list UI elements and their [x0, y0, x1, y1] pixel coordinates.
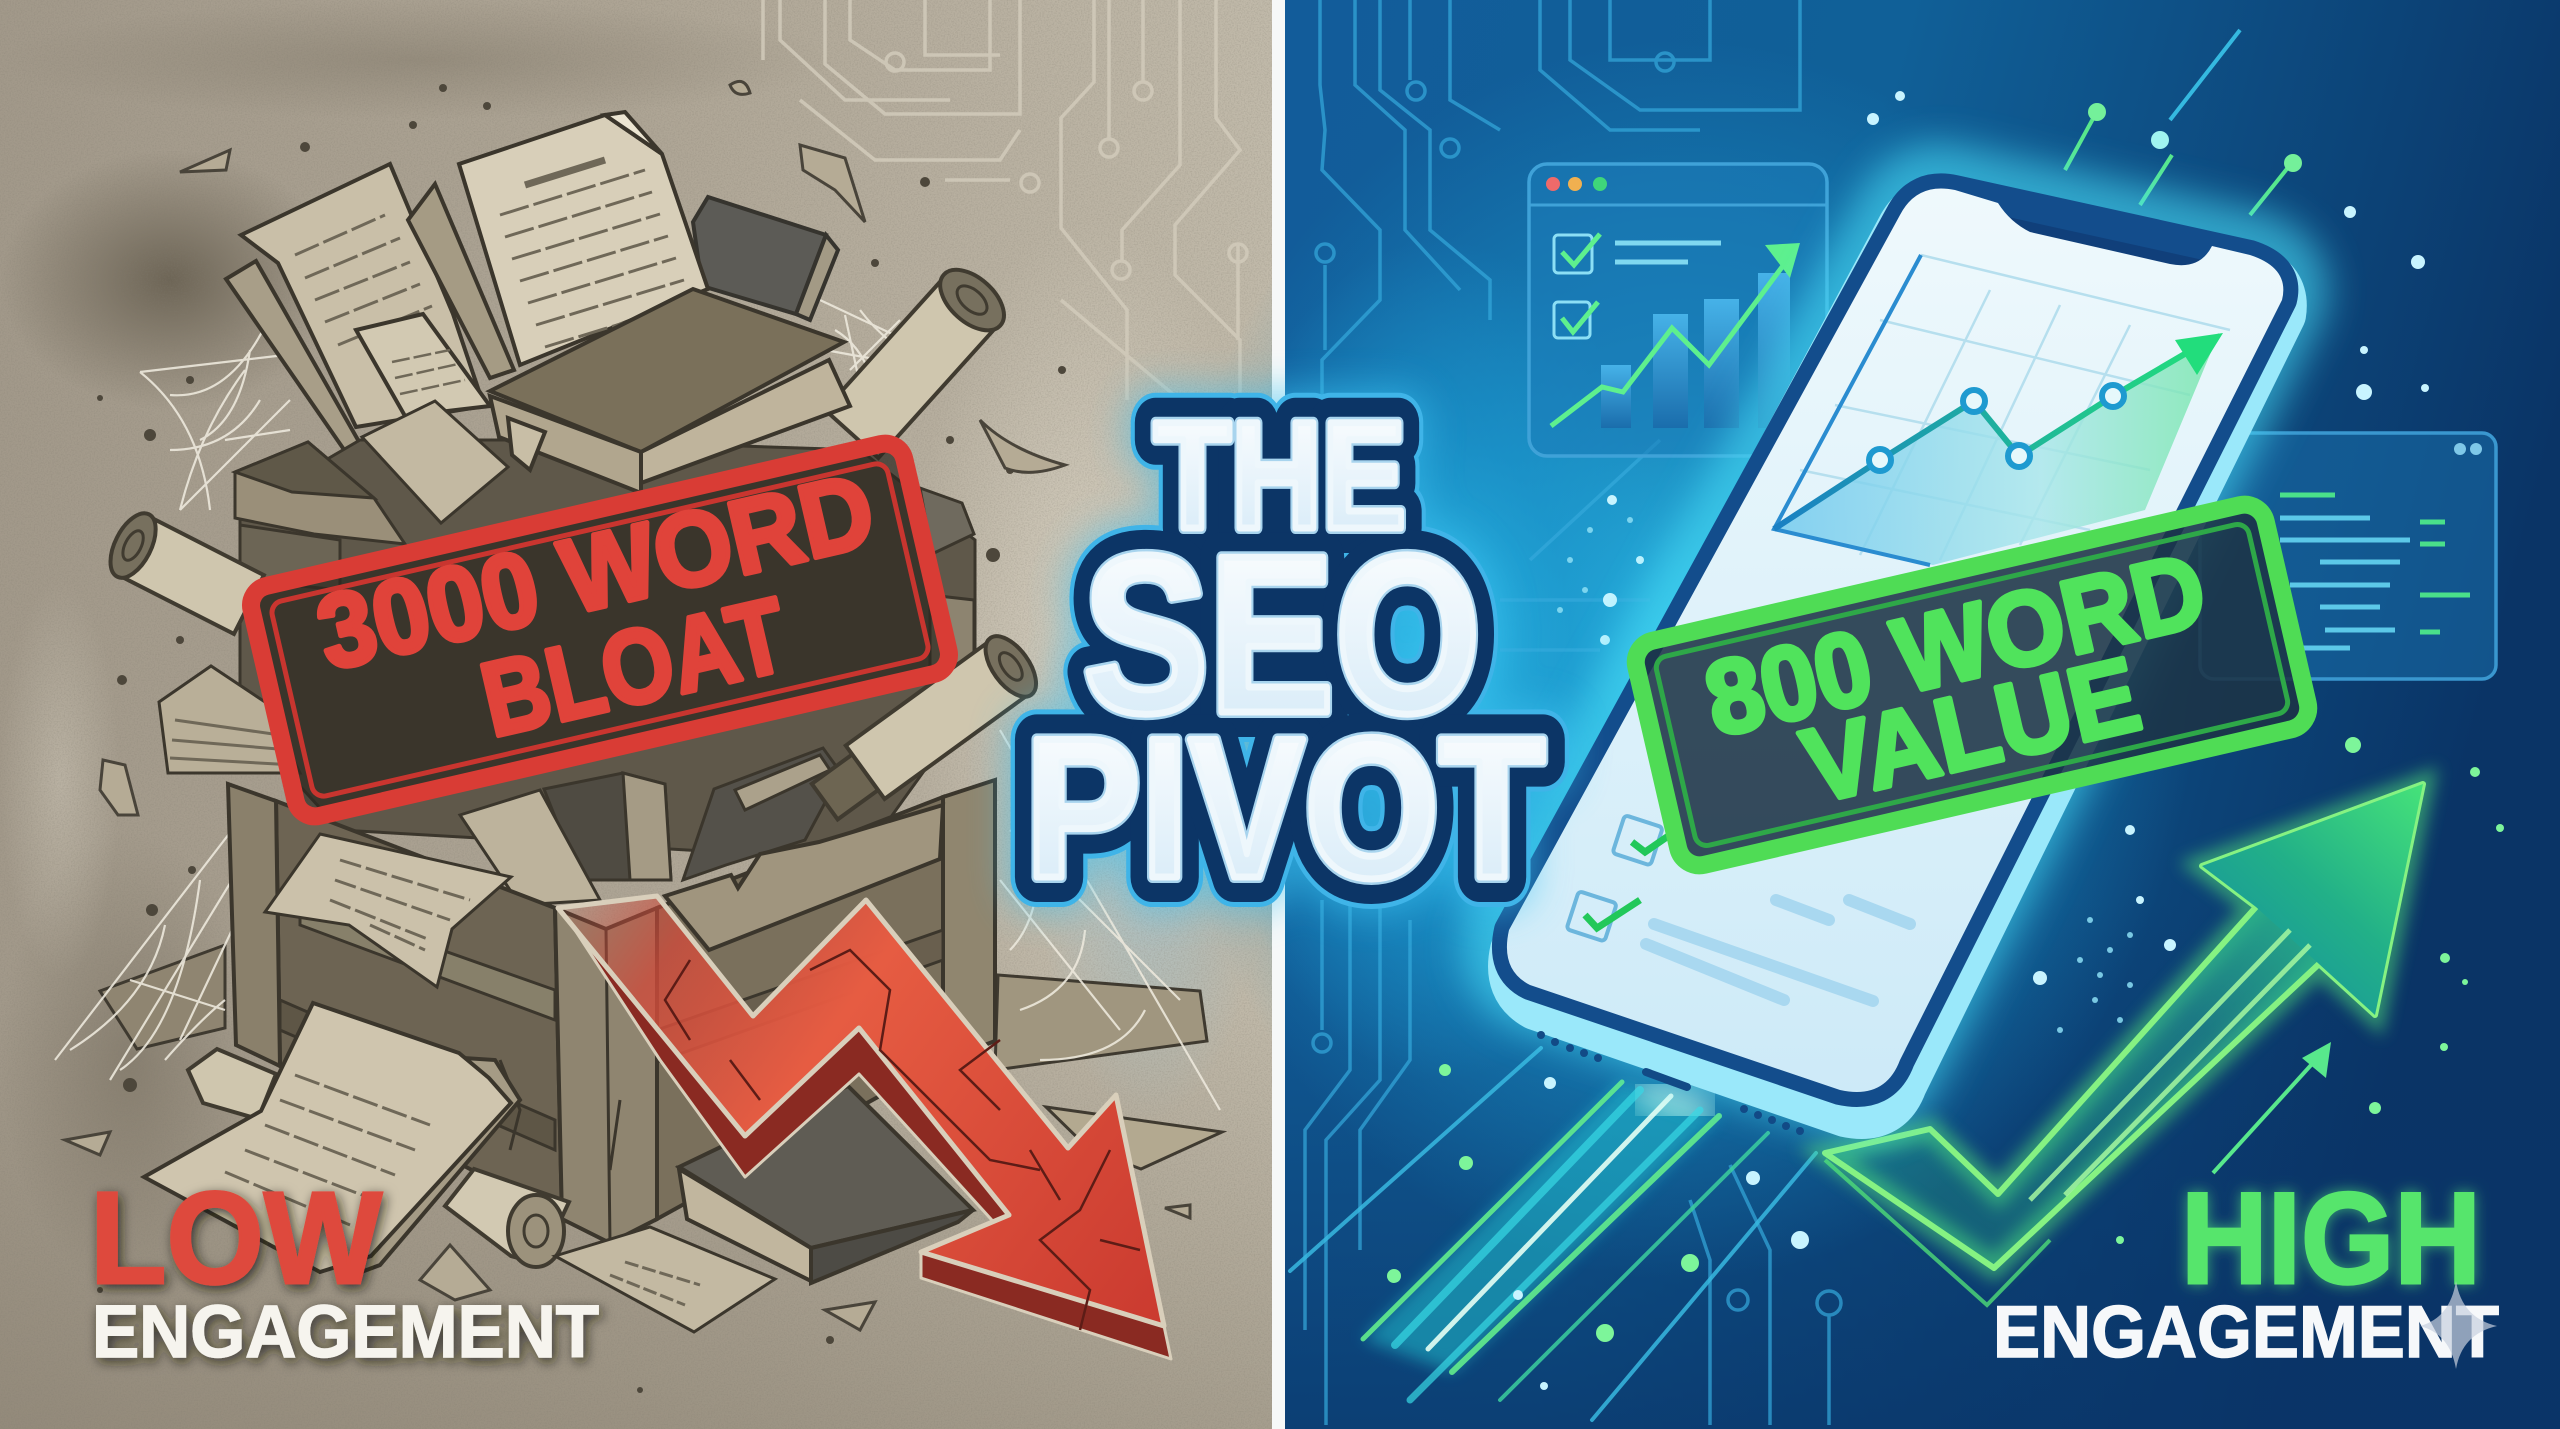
title outer ring — [1025, 390, 1545, 920]
stamp text line 1: 800 WORD — [1695, 531, 2216, 759]
panel: high engagement background — [1160, 0, 2560, 1429]
mini bar chart — [1601, 273, 1790, 428]
stamp text line 2: VALUE — [1792, 636, 2150, 826]
label: low engagement: LOW — [90, 1164, 382, 1311]
sparkle mark — [2420, 1281, 2497, 1369]
scroll: right lower — [804, 628, 1046, 830]
title outer ring: SEO — [1083, 508, 1481, 760]
phone dark bezel — [1507, 188, 2283, 1092]
divider — [1272, 0, 1285, 1429]
title navy backing: THE — [1154, 390, 1406, 561]
dashboard: right code window — [2200, 433, 2496, 679]
circuit lines on right panel — [1305, 0, 1841, 1425]
faded circuit lines on left panel — [763, 0, 1247, 430]
scroll: left — [101, 506, 265, 636]
stamp text line 1: 3000 WORD — [307, 451, 885, 693]
label: high engagement: HIGH — [2181, 1165, 2481, 1311]
fallen book — [679, 1086, 973, 1283]
big green rising arrow — [1825, 784, 2423, 1305]
title: the seo pivot — [1025, 390, 1545, 920]
pile: loose pages bottom left — [144, 1003, 520, 1280]
debris and paper scraps — [65, 81, 1190, 1393]
phone screen — [1507, 188, 2283, 1092]
title letters: PIVOT — [1025, 697, 1545, 920]
label: low engagement — [90, 1164, 599, 1373]
loose paper under crate — [555, 1227, 775, 1332]
scroll: upper right — [823, 258, 1015, 459]
stamp: 800 word value — [1631, 500, 2313, 870]
sparkling dots — [1387, 91, 2504, 1390]
checkboxes — [1554, 234, 1721, 338]
rising pins above phone — [2065, 30, 2302, 215]
title letters: THE — [1154, 390, 1406, 561]
dashboard: top left window — [1529, 164, 1827, 456]
phone — [1507, 188, 2285, 1135]
crate — [228, 780, 995, 1243]
mini trend line — [1551, 243, 1800, 426]
title letter edge: SEO — [1083, 508, 1481, 760]
title letter edge — [1025, 390, 1545, 920]
pile: open book with pages — [408, 112, 708, 378]
scroll: bottom left — [188, 1049, 276, 1119]
phone side edge — [1510, 199, 2285, 1117]
red falling arrow — [558, 896, 1171, 1359]
title outer ring: PIVOT — [1025, 697, 1545, 920]
pile: top book — [490, 289, 850, 493]
scroll: bottom centre — [445, 1169, 569, 1267]
label: high engagement: ENGAGEMENT — [1993, 1292, 2499, 1373]
title navy backing: PIVOT — [1025, 697, 1545, 920]
torn page on crate — [265, 834, 511, 987]
title letters: SEO — [1083, 508, 1481, 760]
light streaks below phone — [1290, 1048, 1816, 1420]
stamp text line 2: BLOAT — [471, 576, 798, 759]
title letter edge: PIVOT — [1025, 697, 1545, 920]
phone glow — [1507, 188, 2283, 1092]
label: low engagement: ENGAGEMENT — [92, 1290, 599, 1373]
title glow: PIVOT — [1025, 697, 1545, 920]
checklist on phone — [1566, 815, 1910, 1001]
panel: low engagement background — [0, 0, 1272, 1429]
title letter edge: THE — [1154, 390, 1406, 561]
pile: central mass of books — [159, 401, 975, 905]
chart on phone — [1774, 255, 2230, 565]
pile: dark back book — [693, 197, 838, 320]
pile: loose sheets behind — [226, 164, 490, 467]
cobwebs — [55, 300, 1220, 1110]
title glow — [1025, 390, 1545, 920]
title navy backing: SEO — [1083, 508, 1481, 760]
label: high engagement — [1993, 1165, 2499, 1373]
title glow: THE — [1154, 390, 1406, 561]
phone speakers and port — [1537, 1031, 1804, 1135]
title letters — [1025, 390, 1545, 920]
title navy backing — [1025, 390, 1545, 920]
title glow: SEO — [1083, 508, 1481, 760]
stamp: 3000 word bloat — [247, 440, 953, 820]
title outer ring: THE — [1154, 390, 1406, 561]
ground papers and rolled scroll behind crate — [100, 945, 1222, 1169]
